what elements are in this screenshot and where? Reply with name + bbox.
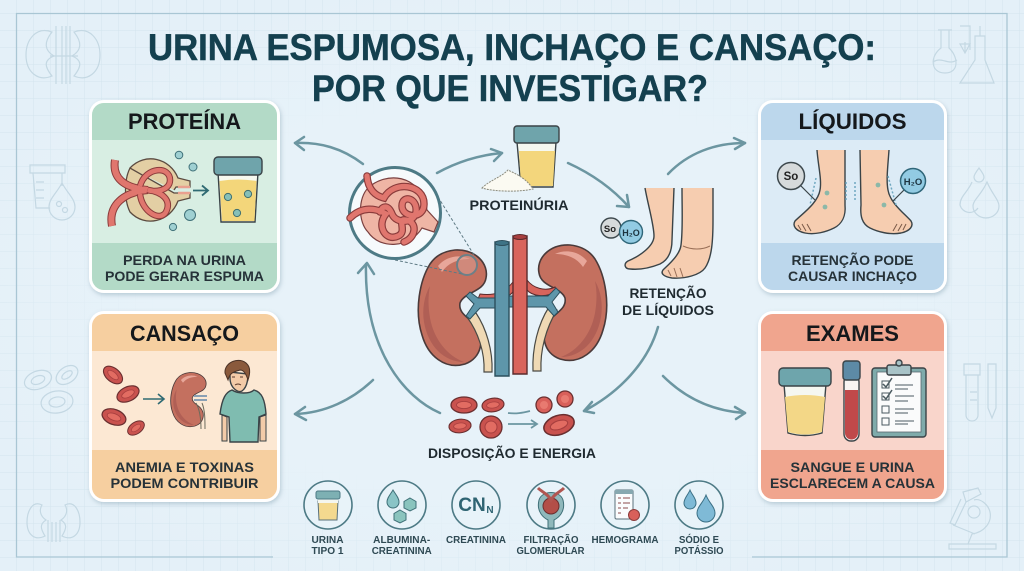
label: urina tipo 1: TIPO 1 xyxy=(312,546,344,557)
heading: exames: EXAMES xyxy=(806,321,899,346)
arrow: to cansaço xyxy=(295,380,373,420)
icon: urina tipo 1 xyxy=(304,481,352,529)
label: sódio e potássio: POTÁSSIO xyxy=(674,544,724,557)
title: URINA ESPUMOSA, INCHAÇO E CANSAÇO: xyxy=(148,27,876,68)
caption: cansaço xyxy=(110,459,258,491)
icon: albumina-creatinina xyxy=(378,481,426,529)
icon: foamy urine and powder xyxy=(482,126,559,191)
panel: cansaço xyxy=(89,311,280,502)
icon: tired person xyxy=(220,360,266,442)
caption: cansaço: ANEMIA E TOXINAS xyxy=(115,459,254,475)
icon: filtração glomerular xyxy=(527,481,575,529)
watermark: drops xyxy=(960,168,999,218)
watermark: kidneys top left xyxy=(26,26,100,84)
panel: líquidos xyxy=(758,100,947,293)
label: retenção de líquidos: DE LÍQUIDOS xyxy=(622,302,714,318)
icon: sodium and water: So xyxy=(604,224,616,235)
icon: sodium and water: H₂O xyxy=(622,228,640,238)
heading: líquidos: LÍQUIDOS xyxy=(798,109,906,134)
arrow xyxy=(193,186,208,196)
watermark: blood cells xyxy=(22,362,81,415)
label: albumina-creatinina: CREATININA xyxy=(372,546,432,557)
icon: creatinina: CN xyxy=(458,495,486,516)
label: albumina-creatinina xyxy=(372,535,432,557)
icon: urine cup xyxy=(779,368,831,436)
arrow: to exames xyxy=(663,376,745,419)
arrow: to proteinúria xyxy=(437,149,502,173)
icon: sodium xyxy=(778,162,815,200)
icon: urine cup with bubbles xyxy=(214,157,262,222)
icon: water xyxy=(893,168,926,201)
watermark: kidneys bottom left xyxy=(27,504,80,542)
caption: líquidos xyxy=(788,251,917,284)
icon: hemograma xyxy=(601,481,649,529)
watermark: flask and cylinder xyxy=(933,26,994,83)
icon: red blood cells xyxy=(100,363,147,438)
arrow: to proteína xyxy=(295,137,363,164)
icon: swollen feet xyxy=(794,150,912,234)
zoom lines xyxy=(395,197,474,274)
caption: cansaço: PODEM CONTRIBUIR xyxy=(110,475,258,491)
caption: proteína: PERDA NA URINA xyxy=(123,252,246,268)
heading: cansaço: CANSAÇO xyxy=(130,321,239,346)
icon: nephron magnifier xyxy=(350,168,440,258)
panel: proteína xyxy=(89,100,280,293)
label: hemograma: HEMOGRAMA xyxy=(592,535,658,546)
label: retenção de líquidos: RETENÇÃO xyxy=(630,284,707,301)
panel: exames xyxy=(758,311,947,502)
icon: sodium: So xyxy=(784,171,798,183)
label: urina tipo 1 xyxy=(312,535,344,557)
icon: creatinina: N xyxy=(486,505,494,516)
label: filtração glomerular xyxy=(516,533,585,557)
icon: glomerulus losing protein xyxy=(111,151,197,231)
caption: proteína xyxy=(105,252,264,284)
icon: clipboard checklist xyxy=(872,360,926,437)
title xyxy=(148,27,876,109)
icon: blood tube xyxy=(843,361,860,441)
arrow: cycle back to nephron xyxy=(358,263,440,413)
heading: proteína: PROTEÍNA xyxy=(128,109,241,134)
label: disposição e energia: DISPOSIÇÃO E ENERGIA xyxy=(428,444,596,461)
test icons row xyxy=(304,481,724,557)
label: filtração glomerular: GLOMERULAR xyxy=(516,546,585,557)
icon: sódio e potássio xyxy=(675,481,723,529)
watermark: microscope xyxy=(949,488,996,549)
caption: líquidos: CAUSAR INCHAÇO xyxy=(788,268,917,284)
title: POR QUE INVESTIGAR? xyxy=(312,68,708,109)
arrow xyxy=(143,394,164,404)
caption: exames xyxy=(770,459,935,491)
arrow: to disposição xyxy=(584,327,658,413)
label: filtração glomerular: FILTRAÇÃO xyxy=(524,533,579,546)
label: creatinina: CREATININA xyxy=(446,535,506,546)
arrow: to líquidos xyxy=(668,138,745,174)
watermark: test tubes xyxy=(964,364,996,421)
icon: swollen legs xyxy=(625,188,713,278)
arrow: to retenção xyxy=(568,163,629,207)
caption: proteína: PODE GERAR ESPUMA xyxy=(105,268,264,284)
icon: sodium and water xyxy=(601,218,642,244)
label: albumina-creatinina: ALBUMINA- xyxy=(373,535,430,546)
caption: líquidos: RETENÇÃO PODE xyxy=(792,251,914,268)
label: retenção de líquidos xyxy=(622,284,714,318)
caption: exames: SANGUE E URINA xyxy=(790,459,914,475)
icon: creatinina xyxy=(452,481,500,529)
label: urina tipo 1: URINA xyxy=(312,535,344,546)
icon: water: H₂O xyxy=(904,177,922,188)
label: sódio e potássio: SÓDIO E xyxy=(679,533,719,546)
icon: kidneys with vessels xyxy=(418,234,607,376)
icon: blood cells center xyxy=(448,391,577,439)
label: proteinúria: PROTEINÚRIA xyxy=(470,196,568,213)
caption: exames: ESCLARECEM A CAUSA xyxy=(770,475,935,491)
watermark: cup and drop xyxy=(30,165,75,220)
label: sódio e potássio xyxy=(674,533,724,557)
icon: small kidney xyxy=(171,372,207,429)
